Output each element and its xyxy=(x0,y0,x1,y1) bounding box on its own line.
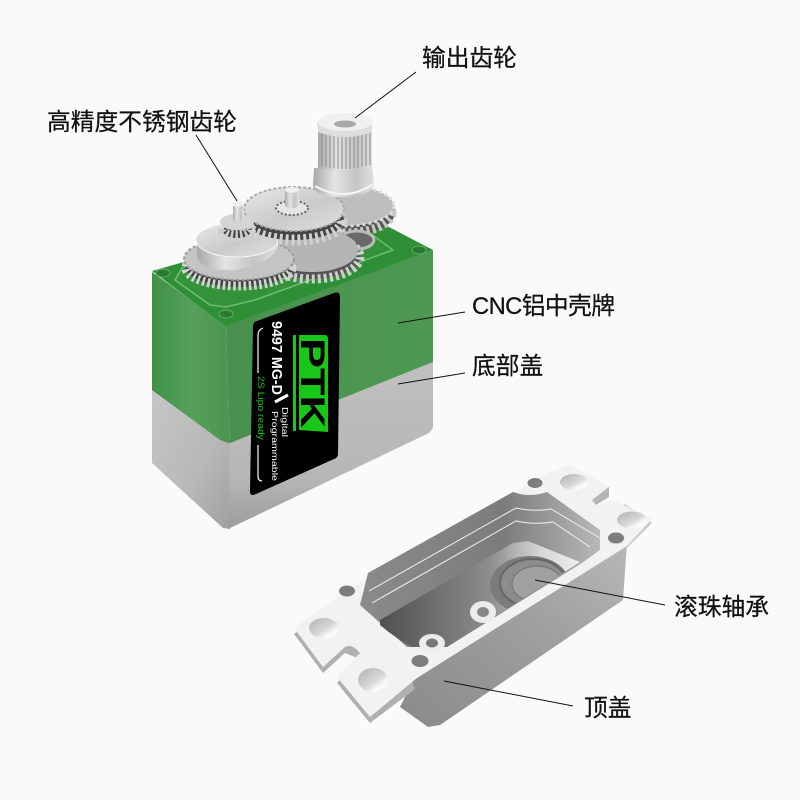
label bracket lines xyxy=(258,328,263,481)
label: ball bearing: 滚珠轴承 xyxy=(674,594,769,621)
label: CNC aluminium shell: CNC铝中壳牌 xyxy=(472,293,615,320)
label: ball bearing xyxy=(535,580,769,621)
label: top cover xyxy=(444,681,632,722)
lipo text: 2S Lipo ready xyxy=(256,376,266,441)
model number: 9497 MG-D xyxy=(268,321,285,395)
PTK logo: PTK xyxy=(293,338,331,429)
ball bearing xyxy=(490,556,566,608)
flange slot wall xyxy=(592,487,609,505)
product label xyxy=(250,292,340,495)
tray side wall xyxy=(400,543,627,727)
label: output gear: 输出齿轮 xyxy=(422,45,517,72)
recess bearing xyxy=(340,231,374,249)
small pinion and shaft on the left xyxy=(220,201,254,238)
divider bar xyxy=(275,395,288,402)
cavity ledge lines xyxy=(369,508,600,603)
cavity xyxy=(360,492,600,647)
label: bottom cover xyxy=(398,353,543,384)
output gear xyxy=(313,113,374,197)
label: top cover: 顶盖 xyxy=(584,695,632,722)
upper middle shaft xyxy=(285,191,299,208)
servo body xyxy=(152,212,433,529)
green top face xyxy=(152,212,433,326)
rear right gear xyxy=(295,186,395,235)
green middle shell, right face xyxy=(226,250,433,443)
label: high precision steel gear: 高精度不锈钢齿轮 xyxy=(47,109,237,136)
rim screw holes xyxy=(339,478,624,667)
cavity floor xyxy=(380,541,580,647)
flange thickness xyxy=(294,606,415,723)
digital programmable text xyxy=(270,407,289,482)
bottom cover tray xyxy=(294,465,652,727)
grey bottom section, right face xyxy=(228,358,433,529)
lower middle gear xyxy=(264,228,360,279)
flange thickness right xyxy=(600,504,652,548)
flange mounting holes xyxy=(309,474,647,692)
cavity bosses xyxy=(419,601,496,652)
gear train xyxy=(184,113,395,287)
mounting flange and rim xyxy=(294,465,652,717)
raised top rim xyxy=(175,215,393,307)
upper middle gear xyxy=(244,187,344,240)
digital programmable text: Digital xyxy=(280,407,289,437)
label: high precision steel gear xyxy=(47,109,237,201)
label: CNC aluminium shell xyxy=(398,293,615,323)
silver hub on the lower-left gear xyxy=(196,223,278,270)
black label plate xyxy=(250,292,340,495)
label: bottom cover: 底部盖 xyxy=(472,353,543,380)
grey bottom section, left face xyxy=(152,385,230,529)
label: output gear xyxy=(355,45,517,118)
digital programmable text: Programmable xyxy=(270,411,279,482)
green middle shell, left face xyxy=(152,272,230,443)
large lower-left gear xyxy=(184,238,294,287)
hub ring xyxy=(276,201,308,215)
screw holes on the top face xyxy=(156,246,426,318)
